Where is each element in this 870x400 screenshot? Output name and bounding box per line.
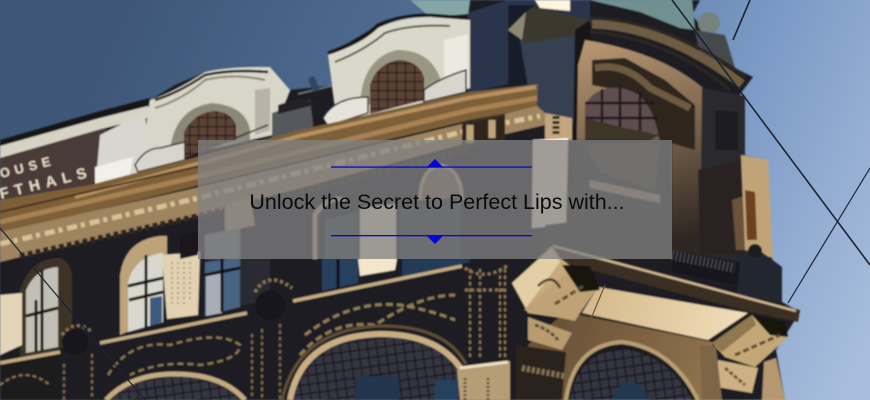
arched beige wall xyxy=(575,18,745,260)
top blue divider with diamond xyxy=(331,159,532,168)
corner turret xyxy=(735,247,782,303)
right dark column xyxy=(698,88,748,270)
facade details behind the panel xyxy=(205,138,672,259)
orange main cornice xyxy=(0,84,538,234)
dome xyxy=(410,0,735,68)
arched lower windows xyxy=(106,326,466,400)
balcony xyxy=(512,245,800,400)
column base xyxy=(457,361,510,400)
antenna and roof box xyxy=(272,76,335,138)
bottom blue divider with diamond xyxy=(331,235,532,244)
right beige strip xyxy=(741,155,773,258)
medallions and columns xyxy=(62,265,508,400)
lower cornice ledges xyxy=(0,266,462,363)
left dormer xyxy=(135,67,290,172)
upper right tower and lamp xyxy=(468,0,592,200)
right dormer xyxy=(323,15,470,128)
dark ornament panels xyxy=(0,268,462,400)
attic sign lettering: FTHALS xyxy=(0,163,94,203)
title text: Unlock the Secret to Perfect Lips with... xyxy=(249,190,625,214)
lower facade windows and pilasters xyxy=(0,232,470,360)
translucent title panel xyxy=(198,140,672,259)
balcony arched window xyxy=(516,342,722,400)
carved entablature frieze xyxy=(0,106,572,262)
left attic cornice xyxy=(0,98,157,212)
